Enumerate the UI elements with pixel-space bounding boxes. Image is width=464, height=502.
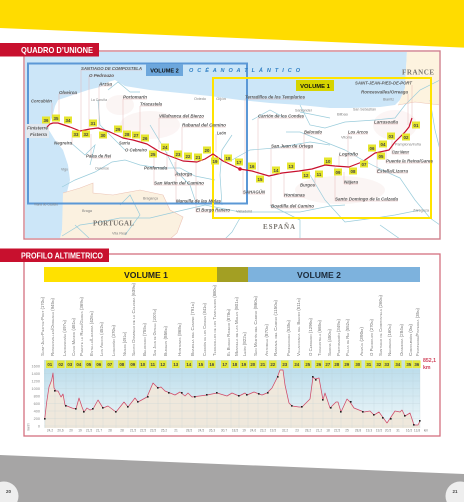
place names: Zaragoza — [413, 208, 429, 212]
place names: Oviedo — [194, 97, 206, 101]
place names: Gijón — [216, 97, 226, 101]
stage distances: km — [424, 428, 428, 432]
place names: Estella/Lizarra — [377, 168, 408, 174]
stage numbers on map: 27 — [134, 133, 139, 138]
stage numbers on map: 35 — [54, 116, 59, 121]
place names: Vitoria — [341, 136, 352, 140]
volume 2 map tag — [146, 64, 183, 76]
place names: Mansilla de las Mulas — [176, 198, 221, 204]
stage town names: Triacastela (665m) — [317, 319, 322, 356]
stage numbers on map: 17 — [237, 160, 242, 165]
stage number row: 16 — [209, 362, 215, 367]
place names: Palas de Rei — [86, 154, 112, 158]
place names: Bragança — [143, 196, 158, 200]
Camino route line — [47, 118, 412, 176]
stage markers on profile — [44, 376, 421, 426]
stage number row: 05 — [86, 362, 92, 367]
stage town names: Palas de Rei (552m) — [345, 318, 350, 356]
place names: Santo Domingo de la Calzada — [335, 196, 398, 202]
stage town names: Santo Domingo de la Calzada (639m) — [131, 282, 136, 356]
stage distances: 22,5 — [334, 428, 340, 432]
stage town names: Portomarín (349m) — [336, 318, 341, 356]
stage number row: 01 — [47, 362, 53, 367]
stage numbers on map: 26 — [143, 136, 148, 141]
sea — [24, 51, 440, 239]
place names: Hontanas — [284, 192, 305, 198]
heading: profilo altimetrico: PROFILO ALTIMETRICO — [21, 252, 104, 260]
stage number row: 25 — [305, 362, 311, 367]
volume 2 map tag: VOLUME 2 — [150, 68, 179, 74]
country labels: PORTUGAL — [93, 220, 134, 228]
volume 1 band: VOLUME 1 — [124, 270, 168, 280]
stage numbers on map: 18 — [226, 156, 231, 161]
stage number row: 13 — [173, 362, 179, 367]
stage distances: 18,5 — [232, 428, 238, 432]
altitude axis: 400 — [34, 410, 40, 414]
place names: SANTIAGO DE COMPOSTELA — [81, 66, 143, 71]
volume 1 map tag — [296, 80, 334, 91]
place names: Finisterre — [27, 126, 48, 130]
altitude axis: 1600 — [32, 364, 40, 368]
stage town names: Nájera (491m) — [122, 331, 127, 356]
place names: Boadilla del Camino — [271, 204, 314, 208]
place names: Triacastela — [140, 102, 162, 106]
shared stage band — [217, 267, 248, 282]
place names: Vigo — [61, 168, 68, 172]
stage distances: 24,5 — [198, 428, 204, 432]
place names: Valladolid — [236, 210, 252, 214]
place names: León — [217, 130, 226, 136]
relief tints — [106, 95, 417, 204]
stage number row: 11 — [150, 362, 156, 367]
place names: Puente la Reina/Gares — [386, 158, 433, 164]
stage distances: 31 — [396, 428, 400, 432]
stage distances: 19,5 — [376, 428, 382, 432]
stage town names: Mansilla de las Mulas (801m) — [234, 296, 239, 356]
page number right — [446, 482, 464, 502]
stage distances: 13,8 — [414, 428, 420, 432]
stage numbers on map: 08 — [351, 169, 356, 174]
page number left: 20 — [6, 489, 11, 494]
stage number row: 34 — [395, 362, 401, 367]
Finisterre label background — [26, 124, 49, 138]
stage number row: 04 — [76, 362, 82, 367]
total distance — [423, 358, 436, 371]
page number left — [0, 482, 18, 502]
stage distances: 20,6 — [57, 428, 64, 432]
altitude axis — [26, 364, 40, 431]
stage distances: 30,7 — [221, 428, 227, 432]
place names: Negreira — [54, 140, 72, 146]
stage numbers on map: 06 — [370, 146, 375, 151]
place names: Viana do Castelo — [34, 202, 58, 206]
ocean label: O C É A N O A T L Á N T I C O — [189, 66, 301, 74]
stage town names: El Burgo Ranero (878m) — [226, 308, 231, 356]
stage town names — [40, 282, 420, 356]
stage number row: 31 — [366, 362, 372, 367]
elevation area — [45, 370, 420, 428]
stage number row: 18 — [232, 362, 238, 367]
stage number row: 08 — [119, 362, 125, 367]
stage town names: Corcubión (0m) — [408, 323, 413, 356]
stage number row: 15 — [198, 362, 204, 367]
place names: San Martín del Camino — [154, 180, 204, 186]
stage town names: O Cebreiro (1296m) — [308, 317, 313, 356]
place names: Cizur Menor — [392, 150, 410, 154]
stage town names: Santiago de Compostela (260m) — [378, 294, 383, 356]
stage number row: 07 — [107, 362, 113, 367]
stage distances: 20,5 — [385, 428, 391, 432]
stage numbers on map: 28 — [125, 132, 130, 137]
place names: Portomarín — [123, 94, 147, 100]
place names: San Juan de Ortega — [271, 144, 313, 148]
stage distances: 21,7 — [96, 428, 102, 432]
stage distances: 21,5 — [130, 428, 136, 432]
stage town names: Puente la Reina/Gares (369m) — [79, 296, 84, 356]
stage numbers on map: 15 — [258, 177, 263, 182]
place names: Olveiroa — [59, 90, 77, 95]
stage town names: San Martín del Camino (860m) — [253, 295, 258, 356]
stage numbers on map: 16 — [250, 164, 255, 169]
stage number row: 26 — [316, 362, 322, 367]
stage town names: Hontanas (868m) — [177, 322, 182, 356]
place names: San Sebastián — [353, 108, 376, 112]
stage numbers on map — [42, 114, 420, 182]
stage number row: 36 — [414, 362, 420, 367]
place names: Biarritz — [383, 98, 394, 102]
place names: Ponferrada — [144, 166, 167, 170]
stage numbers on map: 11 — [317, 172, 322, 177]
place names: Nájera — [344, 180, 358, 184]
panel: map overview — [24, 51, 440, 239]
country borders — [63, 102, 440, 239]
stage numbers on map: 02 — [404, 135, 409, 140]
stage numbers on map: 24 — [163, 145, 168, 150]
place names: Los Arcos — [348, 130, 368, 134]
stage number row: 09 — [130, 362, 136, 367]
total distance: 852,1 — [423, 358, 436, 364]
stage number row: 32 — [376, 362, 382, 367]
stage town names: Sarria (450m) — [327, 328, 332, 356]
top yellow banner — [0, 0, 464, 48]
stage distances: 25,2 — [161, 428, 167, 432]
France tint — [398, 51, 440, 105]
stage numbers on map: 36 — [44, 118, 49, 123]
chart sky — [44, 360, 420, 428]
rivers — [62, 80, 440, 239]
stage town names: Estella/Lizarra (426m) — [89, 310, 94, 356]
place names: Astorga — [174, 172, 192, 176]
stage number row: 21 — [260, 362, 266, 367]
profile frame — [24, 254, 440, 436]
stage number row: 17 — [222, 362, 228, 367]
volume 1 map tag: VOLUME 1 — [300, 84, 331, 90]
stage number row — [44, 360, 420, 369]
stage town names: Larrasoaña (497m) — [62, 319, 67, 356]
place names: Corcubión — [31, 98, 52, 104]
stage numbers on map: 01 — [414, 123, 419, 128]
stage distances: 19 — [78, 428, 82, 432]
land mass — [47, 51, 440, 239]
stage number row: 22 — [270, 362, 276, 367]
volume 1 band — [44, 267, 217, 282]
stage distances: 19,3 — [366, 428, 372, 432]
place names: SAINT-JEAN-PIED-DE-PORT — [355, 80, 413, 86]
stage distances: 22,5 — [140, 428, 146, 432]
stage distances: 28,5 — [186, 428, 192, 432]
stage distances: 16,5 — [406, 428, 412, 432]
place names: O Pedrouzo — [89, 73, 114, 78]
stage numbers on map: 29 — [116, 127, 121, 132]
stage number row: 27 — [325, 362, 331, 367]
place name leader lines — [52, 70, 433, 212]
stage town names: Villafranca del Bierzo (511m) — [296, 297, 301, 356]
stage town names: Boadilla del Camino (791m) — [190, 301, 195, 356]
stage numbers on map: 14 — [274, 168, 279, 173]
stage numbers on map: 31 — [91, 121, 96, 126]
stage numbers on map: 12 — [304, 173, 309, 178]
stage number row: 35 — [406, 362, 412, 367]
country labels: FRANCE — [402, 68, 434, 76]
stage town names: Carrión de los Condes (841m) — [202, 302, 207, 356]
place names: Roncesvalles/Orreaga — [361, 90, 408, 94]
stage distances: 28 — [120, 428, 124, 432]
volume 2 coverage box — [28, 64, 247, 204]
place names: Ourense — [95, 166, 109, 170]
stage numbers on map: 34 — [66, 118, 71, 123]
stage numbers on map: 09 — [336, 170, 341, 175]
stage distances: 23 — [295, 428, 299, 432]
map frame — [24, 51, 440, 239]
stage town names: Olveiroa (284m) — [399, 323, 404, 356]
stage number row: 20 — [250, 362, 256, 367]
stage town names: León (822m) — [242, 331, 247, 356]
stage town names: Ponferrada (535m) — [286, 319, 291, 356]
stage numbers on map: 04 — [381, 142, 386, 147]
heading: profilo altimetrico — [0, 248, 109, 262]
elevation chart — [44, 360, 421, 428]
chart grid — [44, 366, 420, 428]
place names: O Cebreiro — [125, 148, 147, 152]
stage distances: 28 — [108, 428, 112, 432]
stage distances: 28,8 — [355, 428, 361, 432]
place names: Villafranca del Bierzo — [159, 114, 204, 118]
stage number row: 06 — [96, 362, 102, 367]
stage distances: 32,2 — [282, 428, 288, 432]
stage number row: 14 — [186, 362, 192, 367]
stage numbers on map: 25 — [151, 152, 156, 157]
stage town names: Cizur Menor (481m) — [71, 317, 76, 356]
stage distances: 24,2 — [47, 428, 53, 432]
stage number row: 23 — [282, 362, 288, 367]
stage distances: 24,6 — [250, 428, 256, 432]
stage town names: Los Arcos (452m) — [99, 321, 104, 356]
place names: Santander — [295, 108, 313, 112]
volume 1 coverage box — [213, 78, 431, 218]
altitude axis: 800 — [34, 394, 40, 398]
place names: Larrasoaña — [374, 120, 398, 124]
stage number row: 29 — [344, 362, 350, 367]
stage number row: 19 — [241, 362, 247, 367]
stage distances: 21,2 — [316, 428, 322, 432]
stage distances: 21,5 — [86, 428, 92, 432]
stage distances: 25 — [345, 428, 349, 432]
place names: Terradillos de los Templarios — [245, 94, 305, 100]
stage distances: 23,2 — [260, 428, 266, 432]
stage number row: 10 — [140, 362, 146, 367]
stage distances: 23,5 — [150, 428, 156, 432]
stage number row: 02 — [58, 362, 64, 367]
stage town names: Belorado (755m) — [142, 322, 147, 356]
stage distances: 21 — [174, 428, 178, 432]
stage town names: Terradillos de los Templarios (880m) — [212, 284, 217, 356]
Portugal tint — [60, 183, 183, 239]
stage number row: 03 — [67, 362, 73, 367]
stage numbers on map: 22 — [186, 154, 191, 159]
altitude axis: 200 — [34, 417, 40, 421]
place names: Pamplona/Iruña — [395, 142, 421, 146]
place names: Vila Real — [112, 232, 127, 236]
altitude axis: metri — [26, 423, 30, 431]
stage numbers on map: 13 — [289, 164, 294, 169]
stage number row: 12 — [160, 362, 166, 367]
country labels: ESPAÑA — [263, 223, 295, 231]
altitude axis: 600 — [34, 402, 40, 406]
stage numbers on map: 05 — [379, 154, 384, 159]
stage town names: O Pedrouzo (270m) — [369, 318, 374, 356]
stage distances: 28,2 — [305, 428, 311, 432]
place names: Logroño — [339, 152, 358, 156]
heading: quadro d'unione — [0, 43, 99, 56]
stage town names: San Juan de Ortega (1007m) — [152, 308, 157, 356]
place names: Braga — [82, 209, 92, 213]
stage distances: 19,5 — [270, 428, 276, 432]
stage numbers on map: 32 — [84, 132, 89, 137]
place names: Carrión de los Condes — [258, 114, 304, 118]
bottom grey band — [0, 455, 464, 502]
stage numbers on map: 23 — [176, 152, 181, 157]
stage town names: Negreira (160m) — [387, 323, 392, 356]
page number right: 21 — [452, 489, 458, 494]
panel: elevation profile — [24, 254, 440, 436]
place names — [27, 66, 433, 236]
stage town names: Rabanal del Camino (1150m) — [273, 299, 278, 356]
volume 2 band — [248, 267, 420, 282]
stage numbers on map: 33 — [74, 132, 79, 137]
place names: Sarria — [119, 140, 130, 146]
place names: Arzùa — [98, 82, 112, 86]
stage distances: 20 — [69, 428, 73, 432]
place names: Belorado — [304, 130, 322, 134]
stage numbers on map: 07 — [362, 162, 367, 167]
stage numbers on map: 10 — [326, 159, 331, 164]
stage numbers on map: 03 — [389, 134, 394, 139]
altitude axis: 1000 — [32, 387, 40, 391]
place names: Fisterra — [30, 132, 47, 137]
stage distances — [47, 428, 428, 432]
stage distances: 19 — [242, 428, 246, 432]
place names: Rabanal del Camino — [182, 122, 226, 128]
stage town names: Roncesvalles/Orreaga (945m) — [50, 297, 55, 356]
stage number row: 28 — [334, 362, 340, 367]
place names: Bilbao — [337, 112, 348, 116]
stage town names: Astorga (870m) — [264, 323, 269, 356]
country labels — [93, 68, 434, 231]
stage town names: Finisterre/Fisterra (35m) — [415, 307, 420, 356]
stage town names: Burgos (856m) — [163, 325, 168, 356]
stage distances: 18 — [326, 428, 330, 432]
stage numbers on map: 20 — [205, 148, 210, 153]
stage numbers on map: 19 — [213, 159, 218, 164]
place names: Burgos — [300, 182, 315, 188]
stage distances: 26,3 — [209, 428, 215, 432]
total distance: km — [423, 365, 431, 371]
heading: quadro d'unione: QUADRO D’UNIONE — [21, 46, 93, 55]
stage number row: 24 — [294, 362, 300, 367]
stage town names: Arzúa (390m) — [359, 326, 364, 356]
stage numbers on map: 21 — [196, 155, 201, 160]
stage number row: 33 — [384, 362, 390, 367]
altitude axis: 1200 — [32, 380, 40, 384]
volume 2 band: VOLUME 2 — [297, 270, 341, 280]
route point — [238, 167, 242, 171]
stage town names: Saint-Jean-Pied-de-Port (170m) — [40, 296, 45, 356]
place names: El Burgo Ranero — [196, 208, 230, 212]
stage number row: 30 — [355, 362, 361, 367]
place names: SAHAGÚN — [243, 188, 266, 194]
place names: La Coruña — [91, 98, 107, 102]
altitude axis: 1400 — [32, 372, 40, 376]
elevation line — [45, 370, 420, 425]
stage town names: Logroño (370m) — [111, 324, 116, 356]
altitude axis: 0 — [38, 424, 40, 428]
stage numbers on map: 30 — [101, 133, 106, 138]
